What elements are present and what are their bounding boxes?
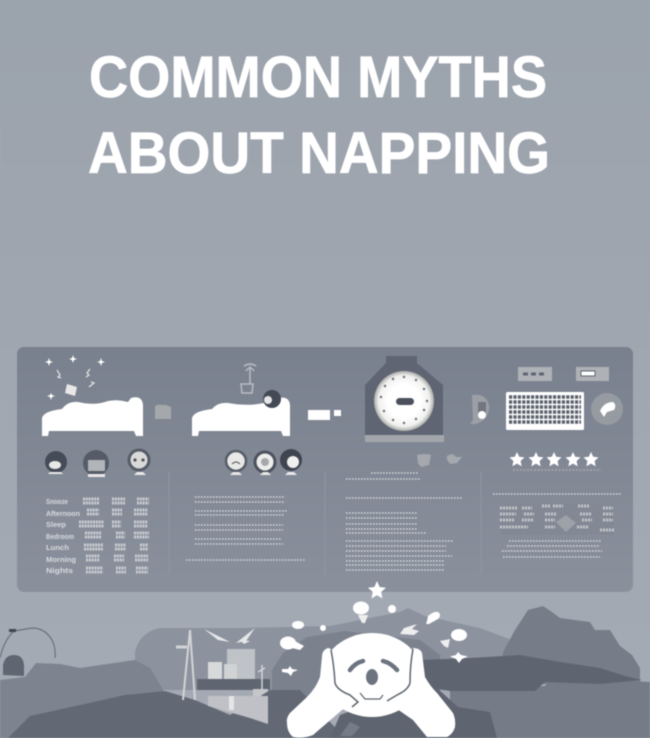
- table of myths: Morning: [46, 557, 76, 564]
- foreground right: [450, 677, 650, 738]
- table of myths: [46, 499, 149, 575]
- icon: sleeper in bed two: [192, 390, 290, 436]
- small diagram column four: [500, 503, 614, 535]
- icon: dome with arc: [0, 628, 55, 676]
- table of myths: Sleep: [46, 522, 66, 529]
- character with hands on cheeks: [287, 633, 455, 738]
- birds: [204, 628, 255, 644]
- star rating: [510, 452, 598, 466]
- icon: left badge: [470, 395, 489, 424]
- dark band: [420, 655, 642, 691]
- back hill left: [135, 608, 512, 690]
- icon: small birds: [417, 454, 462, 467]
- icon: clock house: [365, 356, 444, 442]
- thought icons: [280, 581, 468, 676]
- icon: wind turbine: [176, 630, 265, 700]
- building: [197, 649, 270, 699]
- title: COMMON MYTHS: [89, 45, 547, 110]
- table of myths: Nights: [46, 568, 73, 575]
- foreground dark hill: [8, 690, 345, 738]
- icon: right badge: [591, 393, 623, 425]
- table of myths: Afternoon: [46, 511, 80, 518]
- table of myths: Bedroom: [46, 534, 74, 541]
- right hand: [387, 648, 455, 737]
- landscape: [0, 606, 650, 738]
- text block column four: [493, 494, 621, 557]
- text block column two: [186, 497, 306, 560]
- right hill: [500, 606, 640, 684]
- icon: potted plant: [241, 364, 256, 393]
- face outline: [331, 649, 413, 707]
- left hand: [287, 648, 358, 738]
- panel: myths: [17, 347, 633, 592]
- table of myths: Lunch: [46, 545, 69, 552]
- icon: small connector: [308, 410, 341, 420]
- dark lump by head: [330, 684, 497, 738]
- text block column three: [346, 473, 462, 570]
- table of myths: Snooze: [46, 499, 68, 506]
- mid hill left: [0, 660, 170, 738]
- faces group one: [45, 450, 149, 477]
- eyes and mouth: [350, 661, 397, 670]
- faces group two: [226, 449, 302, 475]
- hill behind head: [272, 631, 440, 700]
- building reflection: [208, 696, 268, 724]
- title: [88, 45, 550, 186]
- title: ABOUT NAPPING: [88, 121, 550, 186]
- icon: usb tiles: [518, 367, 609, 381]
- icon: keyboard: [506, 392, 584, 430]
- icon: sleeper in bed one: [42, 355, 143, 436]
- icon: small case: [155, 405, 171, 419]
